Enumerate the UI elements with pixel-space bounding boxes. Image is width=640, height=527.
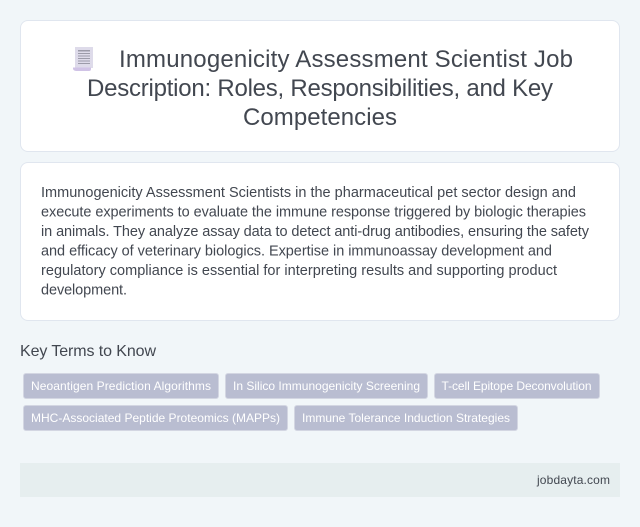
tag: in silico screening: In Silico Immunogenicity Screening xyxy=(233,379,420,393)
tag: t-cell epitope: T-cell Epitope Deconvolution xyxy=(442,379,592,393)
tag: neoantigen prediction xyxy=(23,373,219,399)
title xyxy=(87,46,573,131)
tag: mapps xyxy=(23,405,288,431)
footer text: jobdayta.com xyxy=(536,473,610,487)
heading: key terms: Key Terms to Know xyxy=(20,343,156,360)
icon: document scroll xyxy=(73,47,93,71)
tag: immune tolerance: Immune Tolerance Induction Strategies xyxy=(302,411,510,425)
text block: job description: development. xyxy=(41,282,127,298)
tag list: key terms xyxy=(23,373,600,431)
tag: mapps: MHC-Associated Peptide Proteomics (MAPPs) xyxy=(31,411,280,425)
tag: immune tolerance xyxy=(294,405,518,431)
text block: job description xyxy=(41,185,590,298)
footer bar xyxy=(20,463,620,497)
title: Immunogenicity Assessment Scientist Job xyxy=(119,46,573,73)
panel: description card xyxy=(20,162,620,321)
tag: in silico screening xyxy=(225,373,428,399)
text block: job description: regulatory compliance is essential for interpreting results and supporting product xyxy=(41,263,557,279)
panel: title card xyxy=(20,20,620,152)
tag: t-cell epitope xyxy=(434,373,600,399)
tag: neoantigen prediction: Neoantigen Prediction Algorithms xyxy=(31,379,211,393)
text block: job description: and efficacy of veterinary biologics. Expertise in immunoassay development and xyxy=(41,244,552,260)
text block: job description: execute experiments to evaluate the immune response triggered by biologic therapies xyxy=(41,204,586,220)
text block: job description: Immunogenicity Assessment Scientists in the pharmaceutical pet sector design and xyxy=(41,185,576,201)
text block: job description: in animals. They analyze assay data to detect anti-drug antibodies, ensuring the safety xyxy=(41,224,590,240)
title: Competencies xyxy=(243,104,397,131)
title: Description: Roles, Responsibilities, and Key xyxy=(87,75,553,102)
